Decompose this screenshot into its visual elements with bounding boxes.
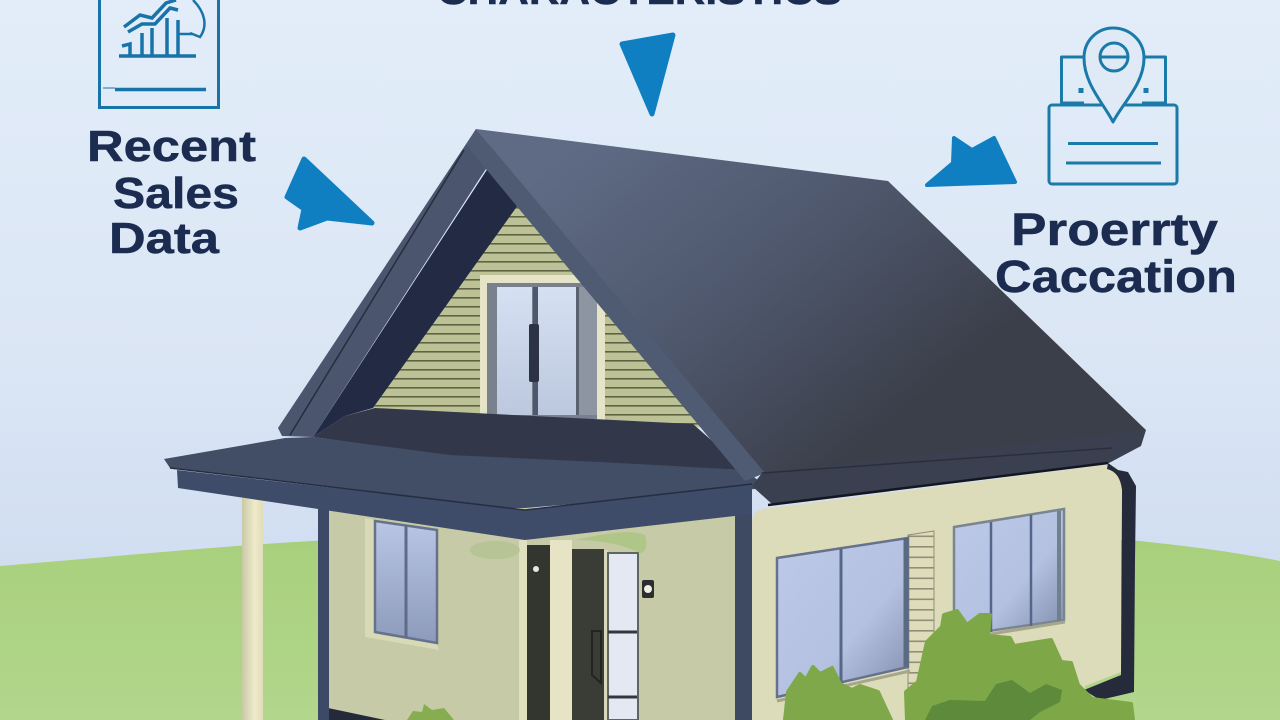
arrow: from characteristics to house — [622, 35, 673, 114]
downpipe on right corner — [1084, 463, 1136, 700]
gable: navy shadow band — [313, 165, 518, 437]
roof: right fascia — [752, 430, 1146, 505]
shrub: small bush near doorway — [407, 704, 454, 720]
gable: siding triangle — [372, 195, 715, 428]
shrub: main bush — [906, 611, 1133, 720]
label: property location: Proerrty — [1011, 204, 1218, 255]
house illustration — [164, 129, 1146, 720]
foundation strip — [328, 708, 385, 720]
shrub: left bush — [785, 667, 891, 720]
window: large right window — [777, 538, 910, 701]
label: property location — [995, 204, 1237, 302]
gable: left barge board — [278, 129, 492, 437]
window: porch window — [365, 518, 439, 650]
roof: porch front fascia — [177, 470, 752, 540]
post: center dark column — [735, 512, 752, 720]
icon: property location pin and card — [1049, 28, 1177, 184]
label: recent sales data: Data — [109, 214, 220, 263]
window: small right window — [954, 509, 1065, 640]
roof: ridge band — [466, 129, 765, 481]
icon: recent sales document — [100, 0, 218, 108]
doorway: doors, sidelight and wall lamp — [470, 532, 654, 720]
post: dark left column — [318, 505, 329, 720]
wall: left porch wall — [328, 505, 735, 720]
arrow: from recent sales to house — [287, 159, 372, 228]
label: recent sales data: Sales — [113, 169, 239, 218]
roof: gutter shadow line — [768, 463, 1108, 505]
arrow: from property location to house — [927, 138, 1015, 185]
roof: main slope — [476, 129, 1146, 476]
label: property location: Caccation — [995, 251, 1237, 302]
gutter line on porch roof — [170, 468, 752, 510]
roof: porch top surface — [164, 437, 768, 508]
gable: barge board line — [290, 150, 464, 435]
porch post: cream column — [242, 498, 263, 720]
gable: window — [480, 275, 605, 420]
roof: fascia top edge — [762, 448, 1112, 473]
green lawn — [0, 540, 1280, 720]
wall: right front wall — [752, 465, 1121, 720]
label: recent sales data — [87, 122, 256, 263]
siding strip between right windows — [908, 531, 934, 720]
label: recent sales data: Recent — [87, 122, 256, 171]
roof: dark under-gable band — [313, 408, 745, 470]
